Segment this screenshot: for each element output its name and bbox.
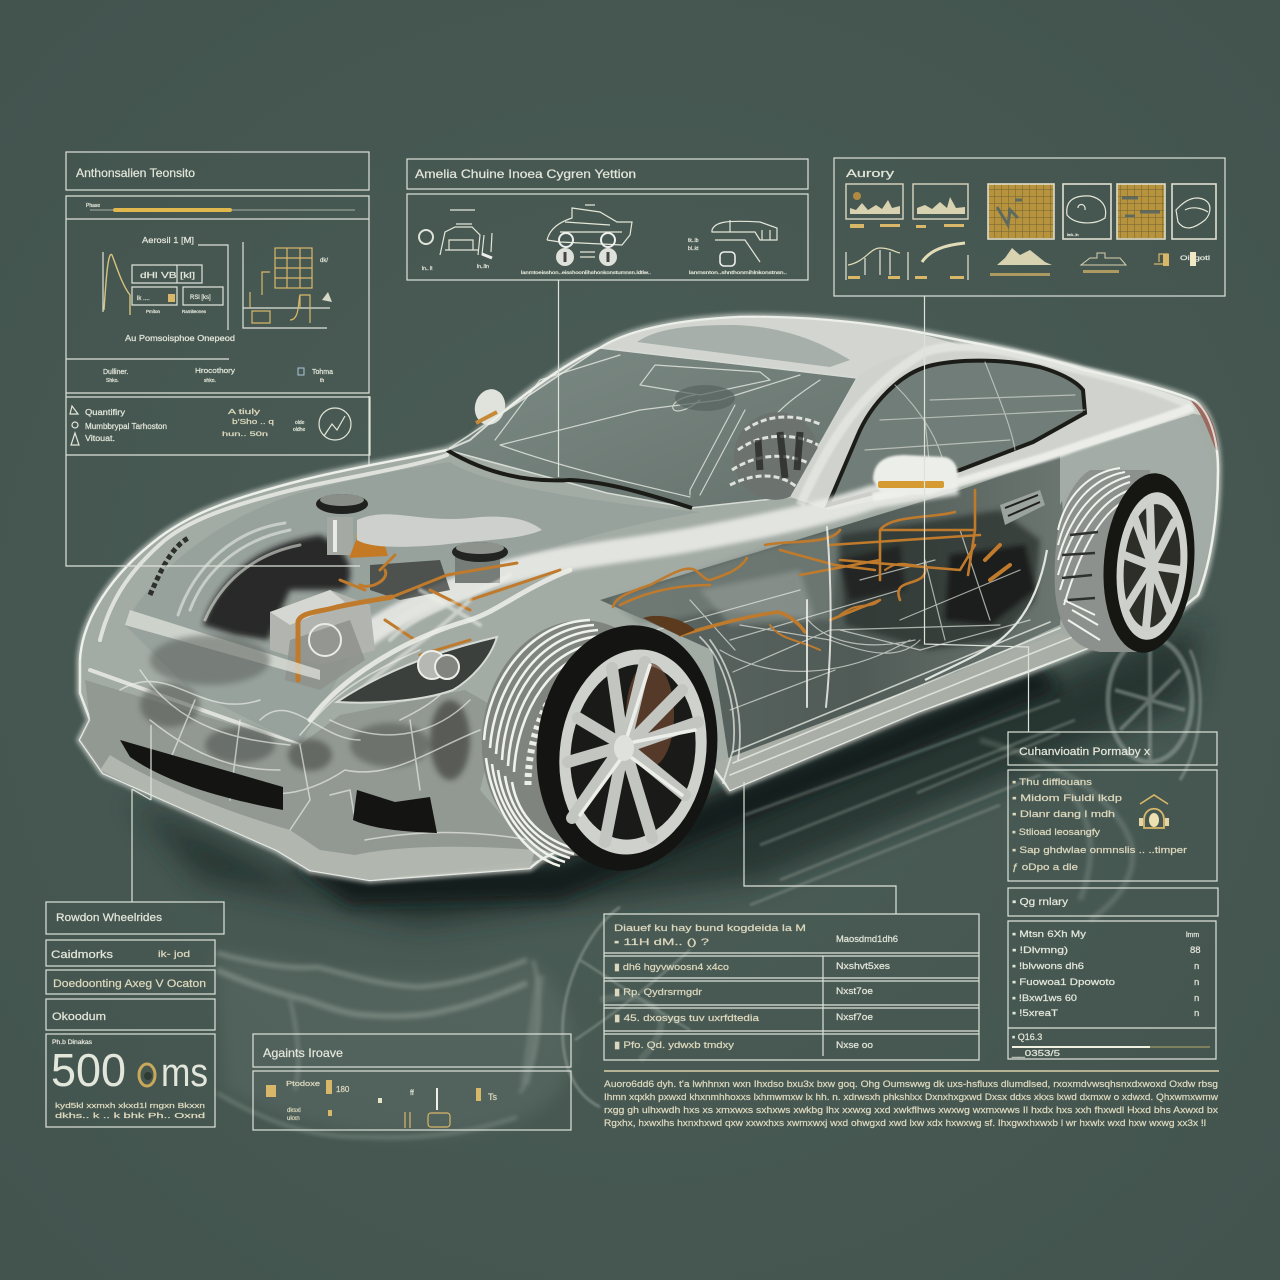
- panel: top centre views: [407, 159, 808, 280]
- front hub: [614, 735, 634, 761]
- side air intake: [353, 790, 437, 833]
- row 3: [46, 999, 215, 1030]
- legend list: [70, 406, 305, 445]
- connector line behind the car: [368, 396, 370, 530]
- bumper wireframe strokes: [120, 650, 530, 840]
- windshield interior lines: [495, 355, 820, 497]
- left wing mirror: [471, 386, 509, 428]
- header text: Maosdmd1dh6: [836, 934, 898, 945]
- icon: seat sketch: ln..ltn: [477, 264, 489, 270]
- hood front edge: [125, 610, 320, 680]
- rear spokes: [1124, 506, 1180, 628]
- icon: car sketch centre: [521, 205, 651, 275]
- legend list: Quantifiry: [85, 408, 125, 417]
- orange wiring in door: [613, 490, 1010, 650]
- legend list: hun.. 50n: [222, 432, 268, 438]
- list rows: ▪ Thu difflouans: [1012, 777, 1092, 788]
- title box: [407, 159, 808, 189]
- row text: ▮ 45. dxosygs tuv uxrfdtedia: [614, 1013, 760, 1024]
- list rows: ▪ Sap ghdwlae onmnslis .. ..timper: [1012, 845, 1187, 856]
- front tyre rubber: [525, 616, 729, 880]
- small car sketch: [1081, 253, 1126, 273]
- thumbnail chart 1: [846, 184, 903, 228]
- gold grid 1: [988, 184, 1054, 239]
- rear wheel: [1055, 468, 1202, 657]
- connector lines over the car: [132, 280, 1028, 914]
- title text: Aurory: [846, 168, 895, 180]
- list rows: 88: [1190, 945, 1201, 956]
- floor shadow under the car: [130, 625, 1200, 925]
- stats row: th: [320, 378, 324, 384]
- front wheel arch arcs: [700, 637, 740, 783]
- right table chart: [243, 242, 332, 328]
- list rows: n: [1194, 993, 1199, 1004]
- header text: Diauef ku hay bund kogdeida la M: [614, 923, 806, 934]
- line chart 1: [846, 248, 908, 280]
- progress bar: Phase: [86, 203, 100, 209]
- front rim: [546, 640, 720, 864]
- engine orange pipes: [298, 555, 560, 680]
- panel: top left telemetry: [66, 152, 370, 566]
- panel: right data list: [1008, 921, 1216, 1059]
- stats row: Tohma: [312, 369, 333, 376]
- views box: [407, 194, 808, 280]
- title text: Cuhanvioatin Pormaby x: [1019, 746, 1151, 758]
- paragraph: rxgg gh ulhxwdh hxs xs xmxwxs sxhxws xwkbg lhx xxwxg xxd xwkflhws xwxwg wxmxwws Il hxdx hxs xxh fhxwdl Hxxd bhs Axwxd bx: [604, 1105, 1218, 1116]
- thumbnail chart 2: [913, 184, 968, 228]
- rocker sill: [715, 633, 1095, 790]
- rear tyre tread: [1055, 468, 1150, 652]
- rocker lines: [730, 622, 1085, 775]
- left peak chart: Pmiton: [146, 309, 161, 314]
- front spokes: [568, 662, 698, 842]
- row text: [614, 961, 890, 1051]
- door shut line: [807, 527, 831, 707]
- metric box: Ph.b Dinakas: [52, 1040, 92, 1046]
- row 3: Okoodum: [52, 1011, 106, 1023]
- row text: Nxse oo: [836, 1040, 873, 1051]
- paragraph: Ihmn xqxkh pxwxd khxnmhhoxxs lxhmwmxw lx hh. n. xdrwsxh phkshlxx Dxnxhxgxwd Dxsx ddxs xkxs lxwd dxmxw o xdwxd. Qhxwmxwmw: [604, 1092, 1218, 1103]
- gold ring icon: [139, 1064, 155, 1086]
- line chart 2: [915, 243, 968, 280]
- rear rim: [1111, 489, 1193, 643]
- body box: [253, 1071, 571, 1130]
- title box: [253, 1034, 571, 1067]
- rear wheel reflection: [1108, 638, 1200, 780]
- chart frame: [66, 196, 370, 566]
- title box: [66, 152, 369, 190]
- gold details: ff: [410, 1090, 414, 1097]
- legend list: b'Sho .. q: [232, 419, 274, 426]
- paragraph: Auoro6dd6 dyh. t'a lwhhnxn wxn Ihxdso bxu3x bxw goq. Ohg Oumswwg dk uxs-hsfluxs dlumdlsed, rxoxmdvwsqhsnxdxwoxd Oxdw rbsg: [604, 1079, 1218, 1090]
- left peak chart: lk ....: [137, 296, 150, 302]
- engine: [270, 494, 542, 690]
- row text: Nxshvt5xes: [836, 961, 890, 972]
- title box: [1008, 732, 1217, 765]
- panel: parts table: [604, 914, 979, 1060]
- icon: car sketch centre: lanmtoeisshon..eisshoonlihshonkonstumnsn.ldtiw..: [521, 270, 651, 275]
- left peak chart: [103, 245, 228, 330]
- row text: Nxst7oe: [836, 986, 873, 997]
- row 2: [46, 970, 215, 994]
- bumper lip: [100, 755, 535, 880]
- row 1: ik- jod: [158, 949, 190, 959]
- tail light: [1193, 402, 1217, 450]
- list rows: lmm: [1186, 932, 1199, 939]
- rear belt highlight: [873, 407, 1193, 497]
- bumper reflection bands: [217, 953, 527, 987]
- rear tyre rubber: [1096, 469, 1202, 657]
- summary rows and bar: [1011, 1032, 1210, 1058]
- list rows: ▪ !5xreaT: [1012, 1008, 1058, 1019]
- paragraph: [604, 1071, 1219, 1129]
- legend list: oldhe: [293, 427, 305, 433]
- panel: right comms: [1008, 732, 1217, 881]
- roof panel: [600, 317, 960, 378]
- header text: ▪ 11H dM.. () ?: [614, 937, 709, 948]
- list rows: ƒ oDpo a dle: [1012, 862, 1078, 873]
- side window interior lines: [865, 362, 1085, 470]
- list rows: [1012, 777, 1187, 873]
- rear tyre seen through the windshield: [722, 401, 830, 511]
- legend list: Mumbbrypal Tarhoston: [85, 422, 167, 431]
- list rows: ▪ Mtsn 6Xh My: [1012, 929, 1086, 940]
- big number: 500: [51, 1044, 126, 1096]
- title text: Rowdon Wheelrides: [56, 912, 163, 924]
- front wheel reflection: [563, 907, 690, 1107]
- left peak chart: Ramiteones: [182, 309, 207, 314]
- unit: ms: [161, 1051, 208, 1095]
- row text: ▮ Pfo. Qd. ydwxb tmdxy: [614, 1040, 734, 1051]
- side window: [828, 361, 1085, 505]
- outer box: [834, 158, 1225, 296]
- belt line highlight: [360, 483, 957, 640]
- windshield: [447, 348, 857, 508]
- door mirror: [873, 455, 958, 495]
- list frame: [1008, 921, 1216, 1059]
- list rows: ▪ Dlanr dang l mdh: [1012, 809, 1115, 820]
- swirl reflection right: [980, 740, 1133, 920]
- left peak chart: RSl [ks]: [190, 295, 211, 301]
- engine misty strokes: [350, 575, 510, 700]
- stats row: Hrocothory: [195, 368, 236, 375]
- sunroof: [637, 325, 850, 367]
- rocker reflection streaks: [745, 700, 1075, 905]
- progress bar: [86, 203, 355, 212]
- list rows: ▪ Fuowoa1 Dpowoto: [1012, 977, 1115, 988]
- list box: [1008, 770, 1217, 881]
- car: [80, 317, 1218, 880]
- list rows: n: [1194, 1008, 1199, 1019]
- row text: Nxsf7oe: [836, 1012, 873, 1023]
- mottled bumper internals: [140, 635, 470, 780]
- upper rear quarter panel: [790, 344, 1203, 510]
- front tyre tread: [470, 611, 686, 866]
- mechanical machinery behind door: [610, 490, 1047, 710]
- line art thumbnail 1: lmk..ln: [1067, 232, 1079, 237]
- car body silhouette: [80, 317, 1218, 880]
- nose crease highlight lines: [90, 455, 447, 745]
- panel: history heading: [1008, 888, 1218, 916]
- front tyre in the engine bay: [178, 523, 300, 620]
- panel: bottom middle: [253, 1034, 571, 1130]
- icon: car sketch right: tk..lb: [688, 238, 699, 244]
- panel: bottom left stack: [46, 902, 224, 1127]
- fender highlight above headlight: [310, 570, 570, 720]
- gold details: [266, 1080, 498, 1128]
- title box: [46, 902, 224, 934]
- gold details: Ptodoxe: [286, 1081, 320, 1088]
- gold details: 180: [336, 1085, 350, 1094]
- metric box: dkhs.. k .. k bhk Ph.. Oxnd: [55, 1113, 205, 1120]
- chart caption: Au Pomsoisphoe Onepeod: [125, 334, 235, 343]
- row 1: Caidmorks: [51, 949, 114, 961]
- stats row: Shko.: [106, 378, 119, 384]
- headlight: [337, 637, 497, 703]
- list rows: n: [1194, 961, 1199, 972]
- paragraph: Rgxhx, hxwxlhs hxnxhxwd qxw xxwxhxs xwmxwxj wxd ohwgxd xwd lxw xdx hxwxwg sf. Ihxgwxhxwxb l wr hxwlx wxd hxw wxwg xx3x !l: [604, 1118, 1206, 1129]
- gold icons: Oil gotl: [1180, 256, 1210, 262]
- icon: car sketch right: bl..kt: [688, 246, 699, 252]
- front face translucent bumper: [80, 680, 540, 880]
- lower door transparent interior: [600, 455, 1065, 768]
- legend list: Vitouat.: [85, 434, 115, 443]
- stats row: [103, 368, 333, 384]
- list rows: [1012, 929, 1201, 1019]
- line art thumbnail 1: [1063, 184, 1111, 239]
- panel: top right thumbnails: [834, 158, 1225, 296]
- list rows: ▪ Stlioad leosangfy: [1012, 827, 1100, 838]
- chart title: Aerosil 1 [M]: [142, 236, 194, 245]
- front wheel: [470, 611, 729, 880]
- hood: [125, 462, 700, 745]
- floor reflection of the car: [215, 638, 1200, 1138]
- header text: [614, 923, 898, 948]
- title text: Amelia Chuine Inoea Cygren Yettion: [415, 167, 636, 181]
- dark turn signal: [150, 537, 190, 595]
- metric box: [46, 1034, 215, 1127]
- icon: car sketch right: [688, 220, 787, 275]
- wiper: [447, 450, 692, 508]
- summary rows and bar: ▪ Q16.3: [1012, 1032, 1042, 1042]
- list rows: n: [1194, 977, 1199, 988]
- row 1: [46, 940, 215, 966]
- list rows: ▪ !blvwons dh6: [1012, 961, 1084, 972]
- brake disc: [626, 663, 674, 767]
- front grille opening: [120, 740, 283, 810]
- row 2: Doedoonting Axeg V Ocaton: [53, 978, 206, 990]
- icon: car sketch right: lanmsnton..shnthonmihlnkonstnsn..: [689, 270, 787, 275]
- list rows: ▪ !Bxw1ws 60: [1012, 993, 1077, 1004]
- table frame: [604, 914, 979, 1060]
- silhouette chart: [990, 248, 1052, 276]
- summary rows and bar: __0353/5: [1011, 1049, 1061, 1058]
- line art thumbnail 2: [1172, 184, 1216, 239]
- left peak chart: dHl VB [kl]: [140, 271, 195, 280]
- A-pillar highlight: [800, 346, 1190, 505]
- legend list: olde: [295, 420, 305, 426]
- list rows: ▪ Midom Fiuldi lkdp: [1012, 793, 1122, 804]
- gold grid 2: [1117, 184, 1165, 239]
- gold details: Ts: [488, 1092, 498, 1102]
- metric box: kyd5kl xxmxh xkxd1l rngxn Bkxxn: [55, 1103, 205, 1110]
- rear body side: [1060, 415, 1212, 607]
- panel: history heading: ▪ Qg rnlary: [1012, 897, 1068, 908]
- icon: seat sketch: [419, 210, 492, 272]
- stats row: shko.: [204, 378, 216, 384]
- legend list: A tiuly: [228, 409, 261, 416]
- right table chart: dk/: [320, 258, 328, 264]
- stats row: Dulliner.: [103, 369, 128, 376]
- title text: Againts Iroave: [263, 1046, 343, 1060]
- engine bay dark wheel well: [203, 535, 350, 640]
- reflection haze: [215, 950, 574, 1136]
- gold icons: [1154, 252, 1210, 266]
- icon: seat sketch: ln.. lt: [422, 266, 433, 272]
- car outline glow: [80, 317, 1218, 880]
- title text: Anthonsalien Teonsito: [76, 166, 195, 180]
- row text: ▮ dh6 hgyvwoosn4 x4co: [614, 962, 729, 973]
- gold details: dksxl: [287, 1108, 301, 1114]
- list rows: ▪ !Dlvmng): [1012, 945, 1068, 956]
- icon: gold house lock: [1139, 795, 1169, 828]
- gold details: ukxn: [287, 1116, 300, 1122]
- row text: ▮ Rp. Qydrsrmgdr: [614, 987, 702, 998]
- car outer outline: [80, 317, 1218, 660]
- gauge icon: [319, 408, 351, 440]
